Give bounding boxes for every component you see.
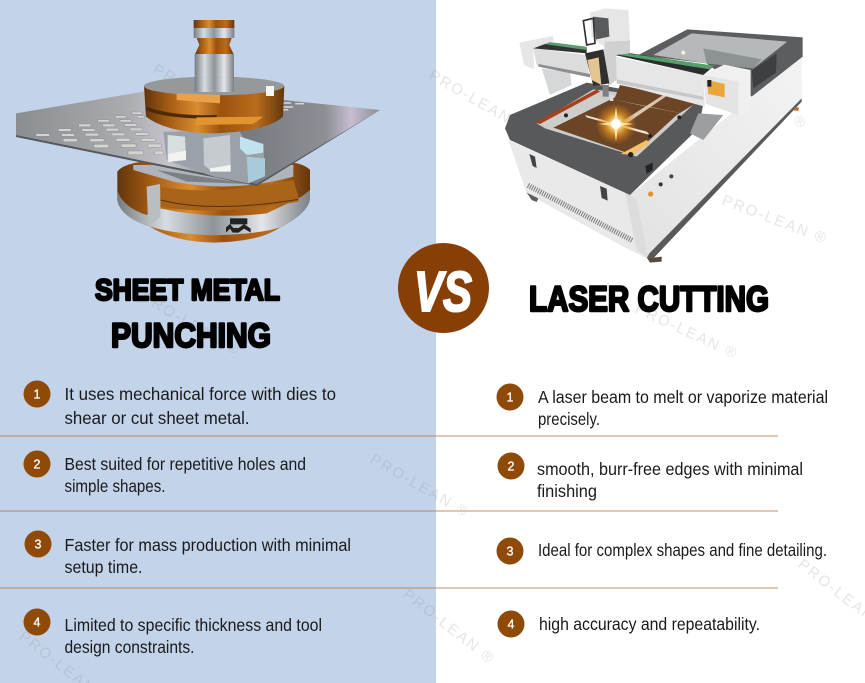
machine body (508, 57, 802, 263)
cutting table (505, 83, 723, 195)
illustration: laser cutting machine (505, 8, 803, 263)
point 3: 3 (507, 544, 514, 558)
point 2: smooth, burr-free edges with minimal (537, 459, 803, 479)
punch column (194, 20, 234, 92)
heading: sheet metal punching: SHEET METAL (95, 274, 280, 307)
point 3 (24, 530, 351, 577)
point 2: Best suited for repetitive holes and (64, 454, 306, 474)
point 3: Faster for mass production with minimal (64, 535, 351, 555)
point 4: design constraints. (64, 637, 194, 657)
point 3: Ideal for complex shapes and fine detailing. (538, 540, 827, 560)
watermarks: PRO-LEAN ® (367, 451, 472, 521)
point 1: 1 (34, 388, 41, 402)
laser spark glow (595, 103, 637, 145)
heading: laser cutting: LASER CUTTING (529, 280, 769, 319)
VS badge: VS (414, 260, 472, 324)
point 1: It uses mechanical force with dies to (64, 384, 336, 404)
point 2: 2 (508, 460, 515, 474)
point 3: 3 (35, 538, 42, 552)
point 4: 4 (508, 618, 515, 632)
punch blocks (157, 132, 265, 184)
illustration: punching tool (16, 20, 380, 243)
watermarks: PRO-LEAN ® (632, 300, 741, 363)
list: laser cutting points (496, 384, 828, 638)
watermarks: PRO-LEAN ® (150, 61, 255, 131)
upper stripper disc (144, 77, 284, 133)
point 4 (24, 608, 322, 657)
watermarks: PRO-LEAN ® (138, 289, 243, 359)
watermarks: PRO-LEAN ® (426, 67, 531, 137)
point 3 (496, 538, 827, 564)
point 2: 2 (34, 458, 41, 472)
metal sheet with holes (16, 92, 380, 186)
heading: sheet metal punching (95, 274, 280, 355)
VS badge (398, 243, 489, 333)
laser head (583, 8, 630, 101)
point 2 (24, 450, 306, 496)
point 1 (496, 384, 828, 429)
point 1: 1 (507, 390, 514, 404)
point 2: simple shapes. (64, 476, 166, 496)
point 4: high accuracy and repeatability. (539, 614, 760, 634)
watermarks: PRO-LEAN ® (400, 586, 498, 668)
point 4: 4 (34, 616, 41, 630)
point 1: precisely. (538, 409, 600, 429)
point 4 (498, 610, 760, 638)
watermarks: PRO-LEAN ® (720, 192, 830, 248)
point 1: A laser beam to melt or vaporize material (538, 387, 828, 407)
lower die ring (117, 160, 310, 243)
point 1 (24, 380, 336, 428)
heading: sheet metal punching: PUNCHING (111, 317, 271, 355)
watermarks: PRO-LEAN ® (701, 70, 810, 133)
point 2 (498, 452, 803, 501)
panel: laser cutting background (436, 0, 865, 683)
point 4: Limited to specific thickness and tool (64, 615, 322, 635)
point 2: finishing (537, 481, 597, 501)
rear window frame (638, 29, 803, 97)
point 3: setup time. (64, 557, 142, 577)
list: punching points (24, 380, 351, 657)
divider lines (0, 436, 778, 588)
panel: sheet metal punching background (0, 0, 436, 683)
point 1: shear or cut sheet metal. (64, 408, 250, 428)
gantry (519, 36, 751, 115)
